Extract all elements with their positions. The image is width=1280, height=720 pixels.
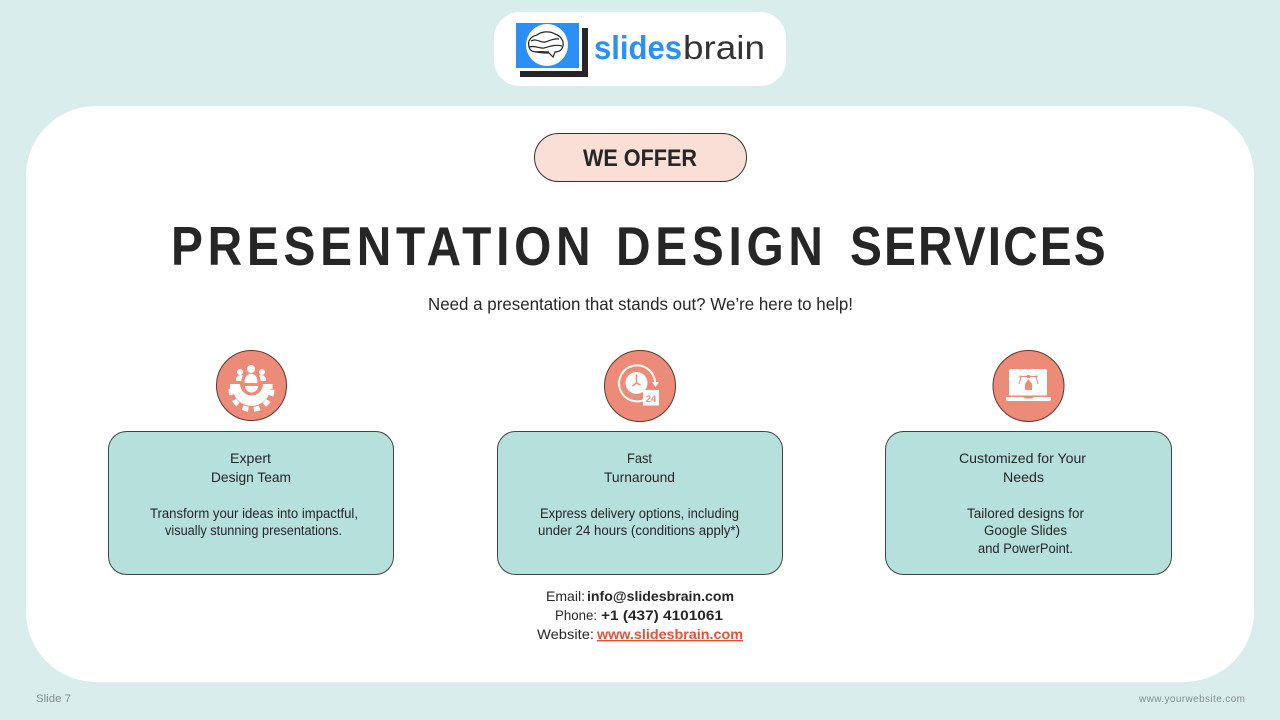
card: customized for your needs: Tailored designs for (967, 506, 1084, 521)
card: expert design team: visually stunning presentations. (165, 523, 342, 538)
subtitle: Need a presentation that stands out? We’re here to help! (428, 294, 853, 314)
contact details: info@slidesbrain.com (587, 588, 734, 604)
badge: we offer: WE OFFER (583, 145, 697, 172)
contact details: Email: (546, 588, 585, 604)
icon: 24 hour clock: 24 (646, 394, 657, 405)
icon: team and gear (216, 350, 286, 420)
title: SERVICES (850, 215, 1108, 277)
card: expert design team: Expert (230, 450, 271, 466)
logo: slidesbrain: brain (683, 29, 765, 66)
contact details: Phone: (555, 607, 597, 623)
contact details (537, 588, 743, 642)
card: fast turnaround: Turnaround (604, 469, 675, 485)
logo: slidesbrain: slides (594, 29, 682, 66)
card: fast turnaround: Express delivery options, including (540, 506, 739, 521)
card: customized for your needs: and PowerPoint. (978, 541, 1073, 556)
contact details: +1 (437) 4101061 (601, 607, 723, 623)
footer: slide number: Slide 7 (36, 693, 71, 705)
badge: we offer (534, 134, 746, 182)
card: customized for your needs: Needs (1003, 469, 1044, 485)
icon: laptop with design tool (993, 350, 1064, 422)
icon: 24 hour clock (604, 350, 676, 422)
card: fast turnaround (498, 432, 782, 574)
card: fast turnaround: under 24 hours (conditions apply*) (538, 523, 740, 538)
title: DESIGN (616, 215, 846, 277)
contact details: Website: (537, 626, 594, 642)
card: fast turnaround: Fast (627, 450, 652, 466)
card: expert design team: Transform your ideas into impactful, (150, 506, 358, 521)
card: expert design team (108, 432, 394, 574)
card: customized for your needs: Customized for Your (959, 450, 1086, 466)
card: customized for your needs (886, 432, 1172, 574)
logo: slidesbrain (494, 12, 786, 86)
panel: main content (26, 106, 1254, 682)
footer: website: www.yourwebsite.com (1138, 694, 1245, 705)
title: PRESENTATION (171, 215, 613, 277)
card: customized for your needs: Google Slides (984, 523, 1067, 538)
card: expert design team: Design Team (211, 469, 291, 485)
contact details: www.slidesbrain.com (596, 626, 743, 642)
